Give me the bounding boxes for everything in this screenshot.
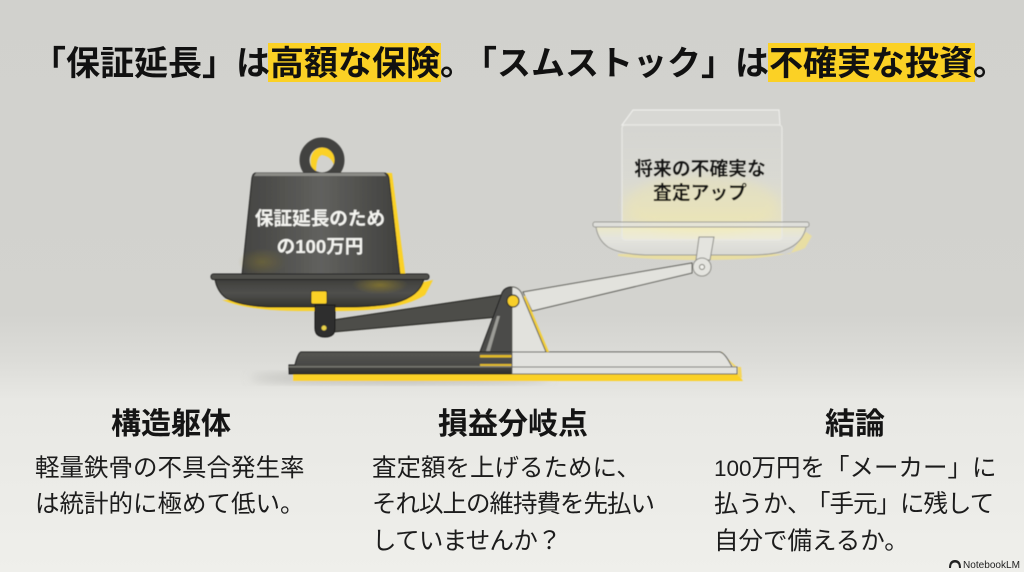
column: 損益分岐点 — [372, 408, 654, 555]
cube label: 査定アップ — [653, 182, 747, 203]
right pan bowl — [596, 227, 806, 255]
body text: それ以上の維持費を先払い — [372, 490, 654, 518]
highlight: 不確実な投資 — [768, 43, 975, 82]
ring — [304, 142, 340, 178]
title text: 「保証延長」は高額な保険。 — [32, 45, 474, 83]
base body right — [512, 352, 737, 374]
weight top highlight — [254, 173, 386, 176]
title — [32, 43, 1007, 83]
glass cube — [622, 110, 782, 240]
base yellow streaks — [480, 355, 512, 366]
base yellow shadow — [293, 374, 743, 381]
title text: スムストック」は不確実な投資。 — [497, 45, 1007, 83]
body text: 軽量鉄骨の不具合発生率 — [35, 454, 304, 482]
right pan group — [593, 110, 812, 276]
right hanger strap — [696, 237, 714, 260]
cube front face — [622, 125, 782, 240]
pan yellow shadow — [222, 280, 433, 311]
pan bowl — [215, 279, 424, 307]
weight body — [242, 173, 400, 275]
balance scale — [211, 110, 812, 383]
title text: 「 — [463, 45, 497, 83]
body text: は統計的に極めて低い。 — [35, 490, 304, 518]
base lip line — [289, 366, 512, 368]
hanger pin — [322, 326, 326, 330]
NotebookLM badge — [949, 559, 1020, 571]
pivot — [507, 295, 519, 307]
beam: left dark arm — [333, 295, 502, 332]
body text: 万円を「メーカー」に — [752, 454, 997, 482]
cube label: 将来の不確実な — [634, 158, 766, 179]
body text: 払うか、 — [714, 490, 812, 518]
cube top face — [622, 110, 780, 125]
pan glint — [352, 276, 408, 294]
left weight group — [238, 142, 406, 280]
right hanger pin — [700, 264, 704, 270]
heading: 損益分岐点 — [438, 408, 588, 441]
heading: 構造躯体 — [111, 408, 231, 441]
body text: 自分で備えるか。 — [714, 527, 909, 555]
cube glow — [626, 175, 778, 235]
base: light right half — [512, 352, 742, 378]
right pan yellow shadow — [618, 232, 812, 260]
body text: 「手元」に残して — [806, 490, 993, 518]
highlight: 高額な保険 — [268, 43, 441, 82]
left pan group — [211, 274, 433, 337]
yellow bracket — [311, 291, 327, 304]
pan rim — [211, 274, 429, 280]
icon: NotebookLM logo — [949, 560, 961, 568]
base body left — [289, 352, 512, 374]
body text: 査定額を上げるために、 — [372, 454, 641, 482]
fulcrum right light — [512, 287, 546, 352]
column: 構造躯体 — [35, 408, 304, 518]
weight label: 保証延長のため — [255, 208, 385, 229]
body text: していませんか？ — [372, 528, 561, 555]
beam: right light arm — [523, 263, 692, 311]
base lip line right — [512, 366, 737, 368]
fulcrum left dark — [480, 287, 512, 352]
right hanger eye — [693, 258, 711, 276]
weight label: の100万円 — [277, 236, 363, 257]
badge text: NotebookLM — [963, 559, 1020, 571]
ring yellow crescent — [311, 147, 341, 173]
column: 結論 — [714, 408, 997, 555]
heading: 結論 — [825, 408, 885, 441]
base yellow right edge — [720, 352, 742, 378]
fulcrum highlight — [486, 316, 500, 351]
ground shadow — [250, 373, 550, 383]
body text: 100 — [714, 456, 752, 481]
right pan rim — [593, 222, 809, 227]
weight yellow shadow — [380, 173, 406, 280]
hanger — [315, 305, 335, 337]
base: dark left half — [289, 352, 512, 374]
weight lower glint — [238, 248, 286, 276]
fulcrum yellow shadow — [523, 295, 549, 352]
